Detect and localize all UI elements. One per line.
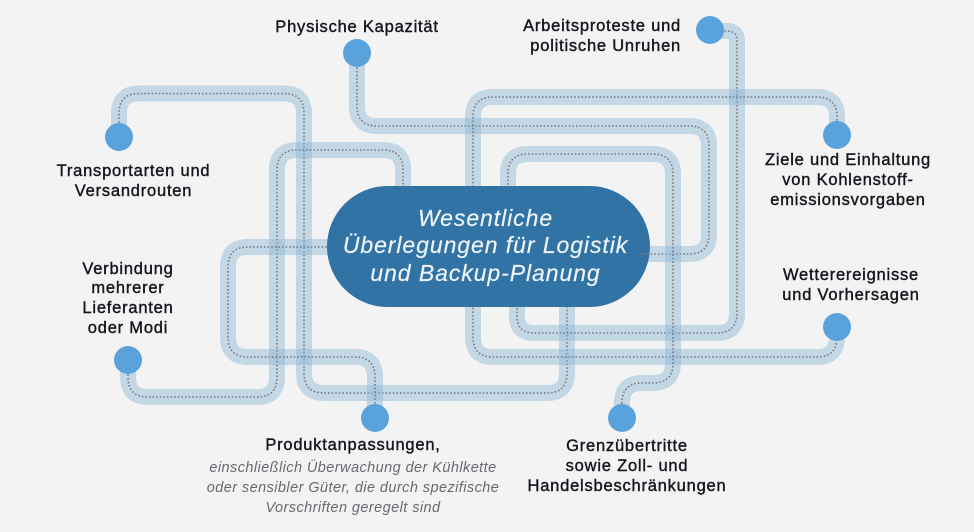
label: Produktanpassungen: Produktanpassungen, [265,436,441,454]
node: Produktanpassungen [361,404,389,432]
route: Grenzübertritte [508,154,673,418]
label: Wetterereignisse: Wetterereignisse [783,266,919,284]
central title: Überlegungen für Logistik [343,232,629,258]
label: Grenzübertritte: Handelsbeschränkungen [528,477,726,495]
route: Produktanpassungen [228,247,375,418]
description: Produktanpassungen: einschließlich Überwachung der Kühlkette [209,458,497,476]
central title: und Backup-Planung [370,260,601,286]
route: Transportarten [119,94,567,393]
label: Grenzübertritte: sowie Zoll- und [566,457,688,475]
route: Verbindung mehrerer Lieferanten [128,150,403,397]
label: Ziele: von Kohlenstoff- [782,171,914,189]
label: Verbindung: mehrerer [91,279,165,297]
label: Verbindung: Lieferanten [82,299,174,317]
route: Physische Kapazität [357,53,709,254]
node: Transportarten [105,123,133,151]
label: Grenzübertritte: Grenzübertritte [566,437,688,455]
label: Arbeitsproteste: politische Unruhen [530,37,681,55]
label: Ziele: emissionsvorgaben [770,191,926,209]
central pill [327,186,650,307]
label: Wetterereignisse: und Vorhersagen [782,286,920,304]
node: Arbeitsproteste [696,16,724,44]
label: Physische Kapazität: Physische Kapazität [275,18,439,36]
node: Grenzübertritte [608,404,636,432]
node: Physische Kapazität [343,39,371,67]
node: Verbindung [114,346,142,374]
route network [119,31,837,418]
route: Arbeitsproteste [517,31,737,333]
central title: Wesentliche [418,205,553,231]
label: Transportarten: Versandrouten [75,182,192,200]
route: Ziele und Wetterereignisse [473,97,837,357]
label: Verbindung: Verbindung [82,260,174,278]
label: Verbindung: oder Modi [88,319,168,337]
node: Wetterereignisse [823,313,851,341]
label: Transportarten: Transportarten und [57,162,210,180]
label: Ziele: Ziele und Einhaltung [765,151,931,169]
description: Produktanpassungen: oder sensibler Güter, die durch spezifische [207,480,499,496]
description: Produktanpassungen: Vorschriften geregelt sind [265,500,441,516]
node: Ziele [823,121,851,149]
label: Produktanpassungen [207,436,499,516]
label: Arbeitsproteste: Arbeitsproteste und [523,17,681,35]
